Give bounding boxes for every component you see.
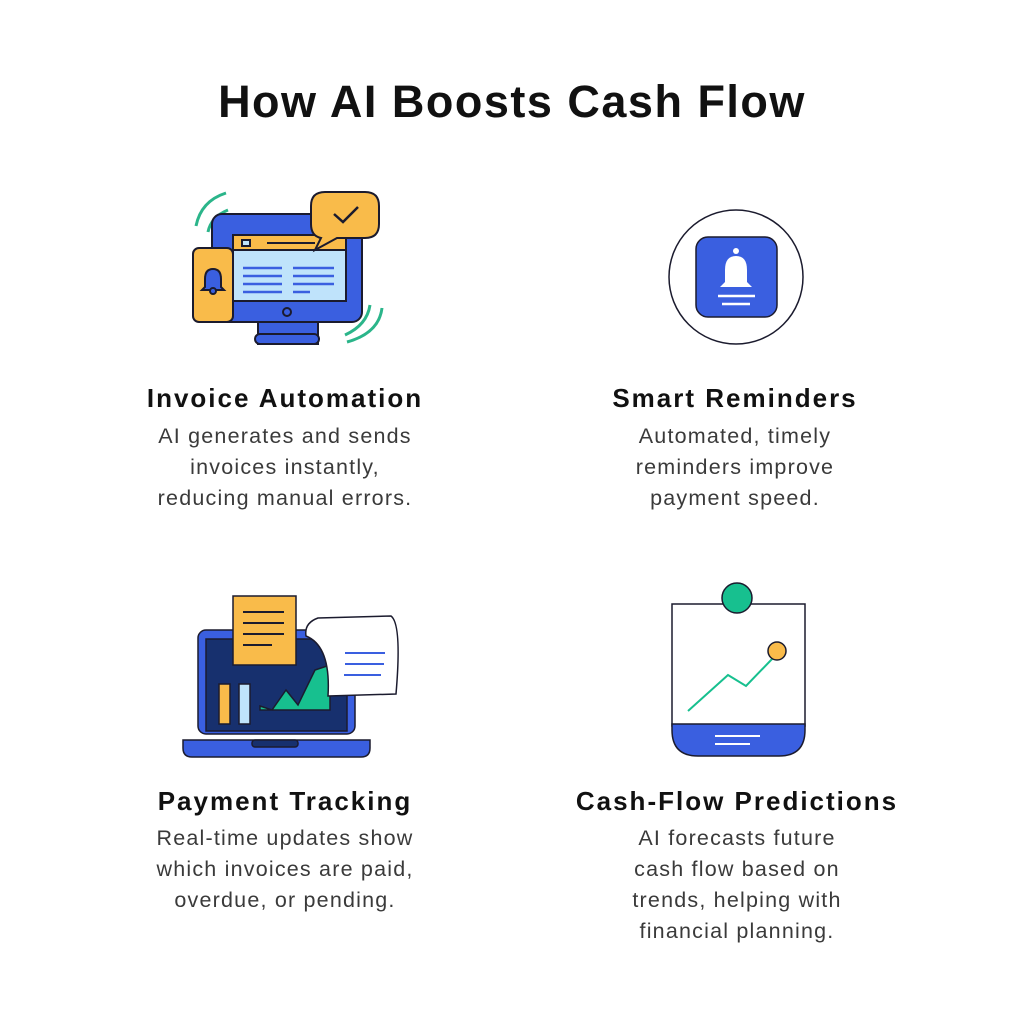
text: cash-flow predictions: AI forecasts future [638,826,836,850]
text: invoice automation [158,424,412,510]
icon: smart reminders bell [669,210,803,344]
text: smart reminders: Automated, timely [639,424,831,448]
heading: cash-flow predictions: Cash-Flow Predictions [576,786,898,816]
text: payment tracking: Real-time updates show [156,826,414,850]
text: cash-flow predictions: cash flow based on [634,857,840,881]
icon: cash-flow predictions phone chart [672,583,805,756]
text: cash-flow predictions [632,826,842,943]
heading: smart reminders: Smart Reminders [612,383,858,413]
text: smart reminders: reminders improve [636,455,834,479]
heading: payment tracking: Payment Tracking [158,786,412,816]
text: smart reminders: payment speed. [650,486,820,510]
title: How AI Boosts Cash Flow [218,76,806,127]
text: cash-flow predictions: trends, helping with [632,888,842,912]
text: invoice automation: reducing manual errors. [158,486,412,510]
text: invoice automation: invoices instantly, [190,455,380,479]
text: payment tracking: which invoices are paid, [156,857,414,881]
heading: invoice automation: Invoice Automation [147,383,423,413]
text: payment tracking: overdue, or pending. [174,888,396,912]
text: payment tracking [156,826,414,912]
icon: invoice automation monitor [193,192,382,344]
text: invoice automation: AI generates and sends [158,424,412,448]
icon: payment tracking laptop [183,596,398,757]
text: cash-flow predictions: financial planning. [640,919,834,943]
text: smart reminders [636,424,834,510]
